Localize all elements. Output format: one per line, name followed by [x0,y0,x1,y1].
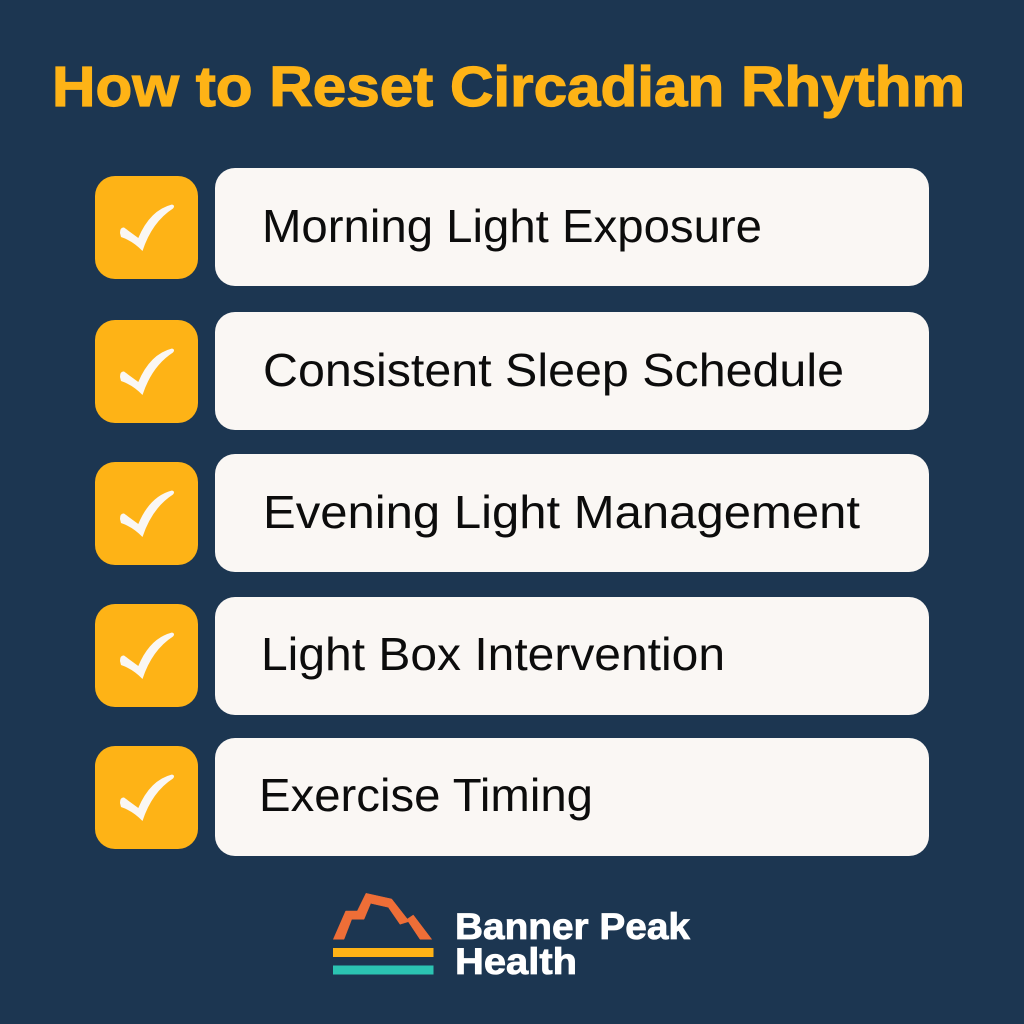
label 2: Consistent Sleep Schedule [263,344,844,396]
card 4 [215,597,929,715]
title: How to Reset Circadian Rhythm [52,55,965,119]
card 2 [215,312,929,430]
row: Morning Light Exposure [95,168,929,286]
icon: mountain [333,893,432,939]
label 4: Light Box Intervention [261,628,725,680]
icon: checkbox 3 [95,462,198,565]
card 1 [215,168,929,286]
card 3 [215,454,929,572]
icon: checkbox 4 [95,604,198,707]
icon: yellow bar [333,948,434,957]
logo text line 2: Health [455,941,577,982]
icon: checkbox 1 [95,176,198,279]
row: Consistent Sleep Schedule [95,312,929,430]
icon: checkbox 5 [95,746,198,849]
logo: Banner Peak Health [333,893,690,982]
logo text line 1: Banner Peak [455,906,690,947]
icon: checkbox 2 [95,320,198,423]
row: Light Box Intervention [95,597,929,715]
label 5: Exercise Timing [259,769,593,821]
row: Evening Light Management [95,454,929,572]
icon: teal bar [333,966,434,974]
row: Exercise Timing [95,738,929,856]
card 5 [215,738,929,856]
label 3: Evening Light Management [263,486,860,538]
label 1: Morning Light Exposure [262,200,762,252]
